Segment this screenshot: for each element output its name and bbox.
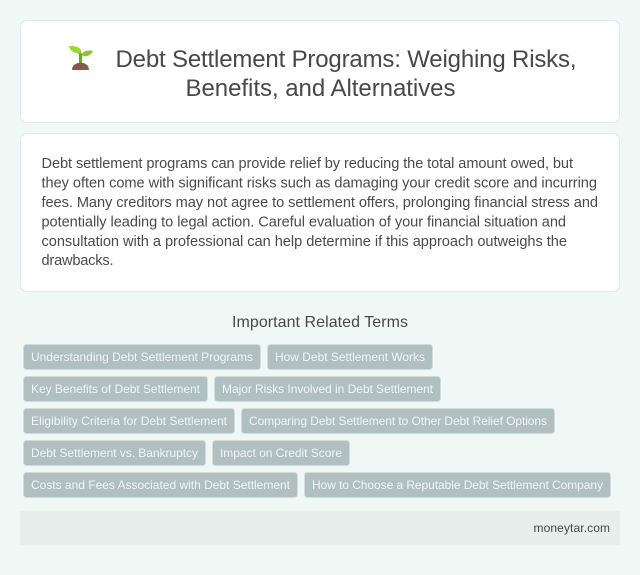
icon: seedling xyxy=(69,46,93,70)
tag xyxy=(242,408,554,434)
tag xyxy=(24,440,206,466)
tag: Comparing Debt Settlement to Other Debt Relief Options xyxy=(249,414,547,428)
tag xyxy=(268,344,432,370)
panel: summary xyxy=(20,134,620,292)
summary text: consultation with a professional can help determine if this approach outweighs the xyxy=(42,234,567,250)
tag: Major Risks Involved in Debt Settlement xyxy=(222,382,434,396)
summary text: drawbacks. xyxy=(42,253,114,269)
tag xyxy=(24,344,260,370)
tag: How Debt Settlement Works xyxy=(275,350,425,364)
related terms tags xyxy=(24,344,610,498)
tag: Costs and Fees Associated with Debt Settlement xyxy=(31,478,291,492)
title: Benefits, and Alternatives xyxy=(186,75,456,102)
summary text: potentially leading to legal action. Careful evaluation of your financial situation and xyxy=(42,214,566,230)
summary text: they often come with significant risks such as damaging your credit score and incurring xyxy=(42,176,597,192)
tag: How to Choose a Reputable Debt Settlement Company xyxy=(312,478,603,492)
tag: Debt Settlement vs. Bankruptcy xyxy=(31,446,198,460)
summary text: Debt settlement programs can provide relief by reducing the total amount owed, but xyxy=(42,156,573,172)
tag xyxy=(214,376,440,402)
footer xyxy=(20,511,620,545)
tag xyxy=(24,408,234,434)
tag: Eligibility Criteria for Debt Settlement xyxy=(31,414,228,428)
source label: moneytar.com xyxy=(534,521,610,535)
tag xyxy=(212,440,350,466)
tag xyxy=(24,376,208,402)
heading: related terms: Important Related Terms xyxy=(232,314,408,331)
panel: header xyxy=(20,20,620,122)
tag xyxy=(304,472,610,498)
tag: Impact on Credit Score xyxy=(220,446,342,460)
title: Debt Settlement Programs: Weighing Risks, xyxy=(116,46,576,73)
tag xyxy=(24,472,298,498)
summary text: fees. Many creditors may not agree to settlement offers, prolonging financial stress and xyxy=(42,195,598,211)
tag: Understanding Debt Settlement Programs xyxy=(31,350,253,364)
tag: Key Benefits of Debt Settlement xyxy=(31,382,201,396)
